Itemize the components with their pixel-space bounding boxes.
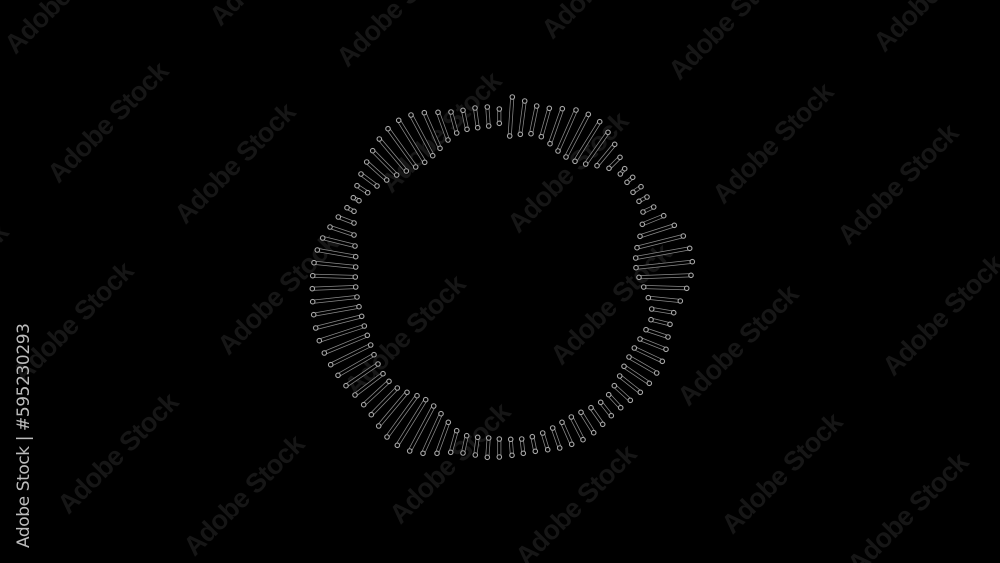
radial ring of capsule spokes (312, 97, 692, 457)
watermark grid: Adobe Stock (545, 237, 678, 370)
watermark grid: Adobe Stock (707, 76, 840, 209)
watermark grid: Adobe Stock (502, 105, 635, 238)
vertical stock id text: Adobe Stock | #595230293 (14, 323, 34, 548)
watermark grid: Adobe Stock (169, 96, 302, 229)
watermark grid: Adobe Stock (212, 227, 345, 360)
watermark grid: Adobe Stock (339, 268, 472, 401)
watermark grid: Adobe Stock (7, 255, 140, 388)
watermark grid: Adobe Stock (375, 65, 508, 198)
watermark grid: Adobe Stock (52, 386, 185, 519)
watermark grid: Adobe Stock (42, 55, 175, 188)
watermark grid: Adobe Stock (384, 396, 517, 529)
watermark grid: Adobe Stock (672, 278, 805, 411)
watermark grid: Adobe Stock (716, 406, 849, 539)
watermark grid: Adobe Stock (832, 117, 965, 250)
watermark grid: Adobe Stock (178, 428, 311, 561)
